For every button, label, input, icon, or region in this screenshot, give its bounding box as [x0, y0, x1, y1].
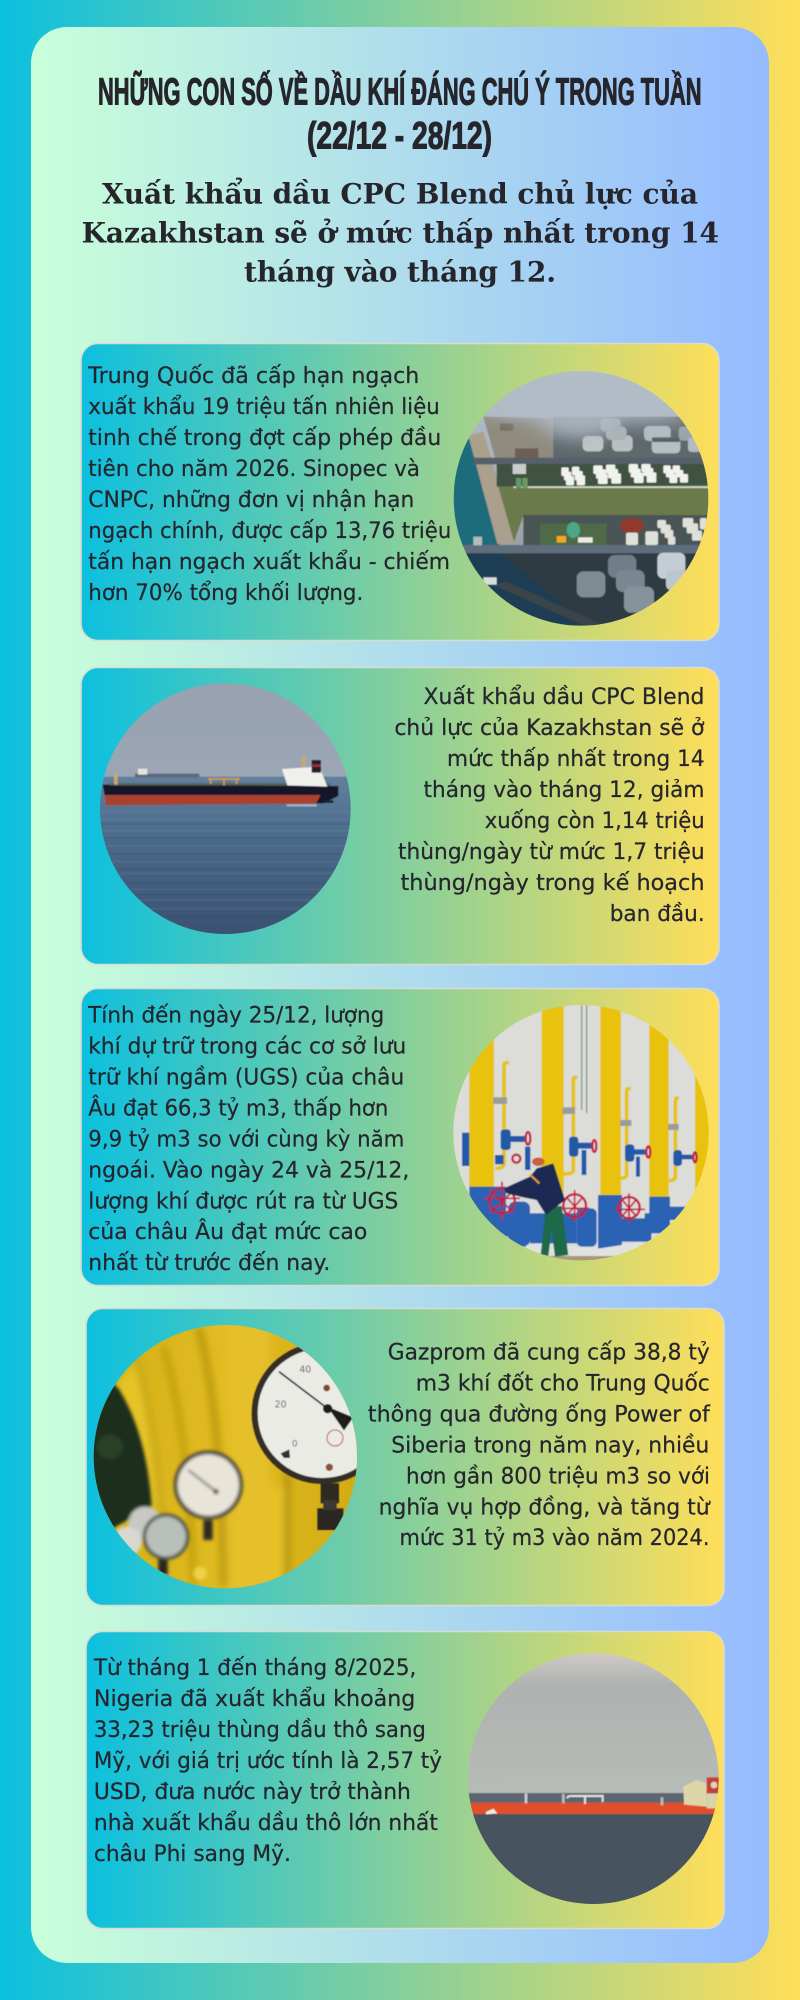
worker	[541, 1206, 568, 1257]
card 4 text: mức 31 tỷ m3 vào năm 2024.	[400, 1526, 710, 1551]
small gauges	[128, 1507, 162, 1540]
card 5 text: 33,23 triệu thùng dầu thô sang	[94, 1718, 426, 1743]
card 1 text: Trung Quốc đã cấp hạn ngạch	[87, 364, 419, 389]
white tanks row	[561, 464, 688, 485]
card 4 background	[86, 1308, 724, 1606]
card 4 text: m3 khí đốt cho Trung Quốc	[416, 1371, 710, 1396]
fog tanks top	[583, 436, 603, 451]
photo: oil tanker at sea	[97, 680, 357, 937]
photo: red tanker on grey sea	[463, 1650, 723, 1907]
card 2 text	[394, 685, 705, 927]
card 1 text: tấn hạn ngạch xuất khẩu - chiếm	[88, 550, 450, 575]
card 3 text	[87, 1004, 409, 1276]
photo: pressure gauges on yellow pipes: 20	[275, 1399, 287, 1410]
big bottom tanks	[608, 555, 636, 578]
panel: Gazprom Power of Siberia	[86, 1308, 724, 1606]
card 3 text: 9,9 tỷ m3 so với cùng kỳ năm	[88, 1128, 404, 1152]
subtitle: Xuất khẩu dầu CPC Blend chủ lực của	[102, 176, 698, 210]
card 5 text: Từ tháng 1 đến tháng 8/2025,	[93, 1656, 416, 1681]
curved pipe stripes	[117, 1357, 170, 1587]
card 1 text: ngạch chính, được cấp 13,76 triệu	[88, 519, 451, 544]
card 4 text: thông qua đường ống Power of	[368, 1402, 711, 1427]
panel: China export quota	[81, 344, 719, 640]
subtitle: tháng vào tháng 12.	[244, 256, 556, 288]
photo: pressure gauges on yellow pipes: 40	[299, 1364, 311, 1375]
title	[98, 68, 702, 157]
subtitle	[82, 176, 719, 288]
photo: refinery aerial view	[450, 363, 713, 630]
blue bases	[469, 1187, 687, 1252]
card 3 background	[81, 988, 719, 1286]
panel: European gas storage	[81, 988, 719, 1286]
card 1 text: tinh chế trong đợt cấp phép đầu	[88, 426, 441, 451]
red handwheels	[484, 1132, 697, 1223]
card 1 text: CNPC, những đơn vị nhận hạn	[88, 488, 414, 513]
card 5 text	[93, 1656, 442, 1867]
large gauge	[321, 1483, 339, 1503]
panel: CPC Blend exports	[81, 668, 719, 964]
card 3 text: Âu đạt 66,3 tỷ m3, thấp hơn	[88, 1096, 388, 1122]
card 2 text: mức thấp nhất trong 14	[447, 747, 705, 772]
card 3 text: Tính đến ngày 25/12, lượng	[87, 1004, 384, 1028]
card 4 text: Siberia trong năm nay, nhiều	[391, 1433, 709, 1458]
card 5 text: Nigeria đã xuất khẩu khoảng	[94, 1687, 415, 1712]
panel: Nigeria crude exports	[86, 1632, 724, 1928]
card 2 background	[81, 668, 719, 964]
card 1 text: xuất khẩu 19 triệu tấn nhiên liệu	[88, 395, 440, 420]
yellow columns	[469, 1005, 710, 1197]
card 1 background	[81, 344, 719, 640]
dark foliage	[94, 1383, 154, 1529]
thin pipes	[495, 1063, 679, 1181]
card 3 text: nhất từ trước đến nay.	[88, 1251, 330, 1276]
card 5 text: châu Phi sang Mỹ.	[94, 1842, 291, 1867]
card 2 text: thùng/ngày trong kế hoạch	[400, 871, 704, 896]
card 3 text: ngoái. Vào ngày 24 và 25/12,	[88, 1158, 409, 1184]
card 2 text: thùng/ngày từ mức 1,7 triệu	[398, 840, 705, 865]
card 5 text: Mỹ, với giá trị ước tính là 2,57 tỷ	[94, 1749, 442, 1774]
card 5 text: nhà xuất khẩu dầu thô lớn nhất	[94, 1811, 438, 1836]
subtitle: Kazakhstan sẽ ở mức thấp nhất trong 14	[82, 216, 719, 250]
card 4 text: Gazprom đã cung cấp 38,8 tỷ	[388, 1340, 710, 1365]
ground	[526, 1244, 623, 1253]
card 1 text: hơn 70% tổng khối lượng.	[88, 581, 363, 606]
photo: pressure gauges on yellow pipes	[94, 1325, 357, 1588]
fog	[467, 363, 697, 438]
card 4 text	[368, 1340, 711, 1551]
card 5 background	[86, 1632, 724, 1928]
card 2 text: Xuất khẩu dầu CPC Blend	[424, 685, 704, 710]
card 2 text: tháng vào tháng 12, giảm	[424, 778, 704, 803]
card 2 text: chủ lực của Kazakhstan sẽ ở	[394, 716, 705, 741]
blue valves	[462, 1129, 693, 1177]
photo: pressure gauges on yellow pipes: 0	[292, 1440, 298, 1450]
card 1 text: tiên cho năm 2026. Sinopec và	[88, 457, 420, 482]
card 2 text: xuống còn 1,14 triệu	[485, 809, 705, 834]
card 4 text: hơn gần 800 triệu m3 so với	[406, 1464, 710, 1489]
card 4 text: nghĩa vụ hợp đồng, và tăng từ	[379, 1495, 711, 1520]
card 3 text: lượng khí được rút ra từ UGS	[88, 1190, 398, 1214]
title: (22/12 - 28/12)	[307, 115, 492, 157]
card 3 text: của châu Âu đạt mức cao	[88, 1219, 367, 1245]
card 5 text: USD, đưa nước này trở thành	[94, 1780, 411, 1805]
lower plant	[620, 518, 644, 534]
card 3 text: khí dự trữ trong các cơ sở lưu	[88, 1034, 406, 1060]
photo: gas storage worker at valves	[450, 1003, 713, 1265]
card 1 text	[87, 364, 451, 606]
card 2 text: ban đầu.	[610, 902, 705, 927]
card 3 text: trữ khí ngầm (UGS) của châu	[88, 1066, 404, 1090]
